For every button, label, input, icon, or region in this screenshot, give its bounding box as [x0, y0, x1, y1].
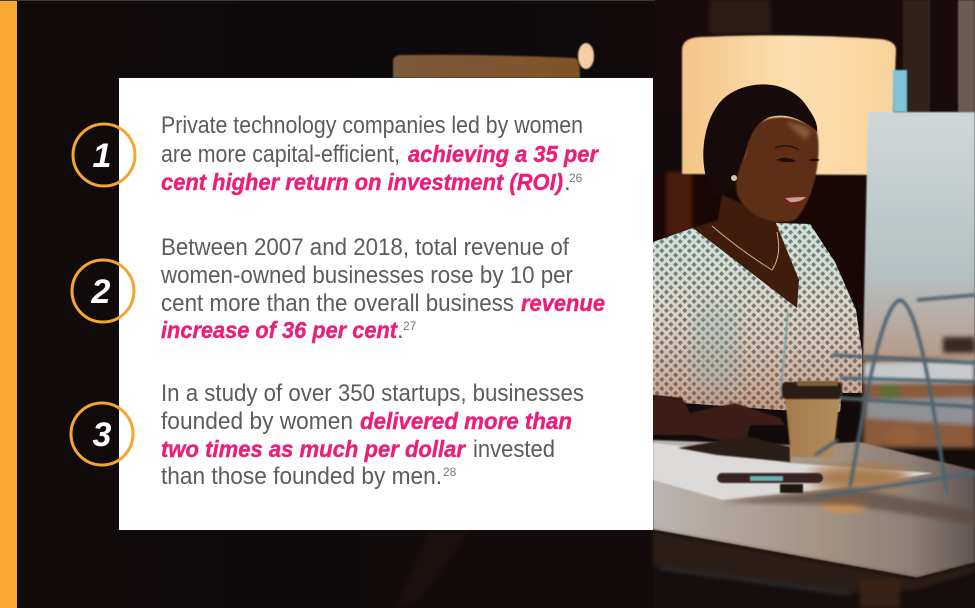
wire tray — [815, 295, 975, 497]
text block 3: than those founded by men. — [161, 463, 442, 490]
background lamp small — [393, 43, 594, 78]
desk — [653, 440, 975, 608]
text block 1: Private technology companies led by women — [161, 112, 583, 139]
computer monitor — [863, 112, 975, 360]
white text panel — [119, 78, 653, 530]
text block 1: achieving a 35 per — [408, 141, 600, 167]
woman's blouse — [653, 223, 862, 412]
necklace — [712, 226, 779, 270]
facial features — [731, 122, 820, 208]
text block 3: founded by women — [161, 408, 353, 435]
text block 2: women-owned businesses rose by 10 per — [160, 262, 573, 289]
orange side bar — [0, 1, 17, 608]
coffee cup — [782, 381, 842, 457]
paper on desk — [653, 443, 975, 525]
woman's neck and chest — [693, 195, 799, 308]
computer mouse and pad — [678, 436, 790, 462]
text block 3 — [161, 380, 584, 490]
text block 2: 27 — [403, 319, 417, 333]
woman's hand — [653, 395, 785, 445]
blue light — [893, 70, 907, 112]
number 2 badge: 2 — [91, 273, 111, 311]
text block 1: 26 — [569, 171, 583, 185]
lamp shade — [682, 35, 896, 175]
number 2 badge — [72, 260, 134, 322]
woman's face — [736, 117, 819, 222]
text block 3: invested — [473, 436, 555, 463]
text block 2: increase of 36 per cent — [161, 317, 398, 343]
text block 1: . — [564, 169, 571, 196]
text block 1: are more capital-efficient, — [161, 141, 400, 168]
text block 3: delivered more than — [360, 408, 572, 434]
number 1 badge — [73, 124, 135, 186]
number 3 badge — [71, 403, 133, 465]
text block 2 — [160, 234, 605, 344]
text block 2: . — [397, 317, 404, 344]
text block 3: two times as much per dollar — [161, 436, 467, 462]
text block 2: Between 2007 and 2018, total revenue of — [161, 234, 569, 261]
number 1 badge: 1 — [93, 137, 111, 175]
text block 1: cent higher return on investment (ROI) — [161, 169, 563, 195]
text block 2: cent more than the overall business — [161, 290, 514, 317]
phone — [717, 473, 823, 493]
desk clutter behind — [863, 337, 975, 448]
text block 1 — [161, 112, 600, 196]
woman's hair — [703, 84, 817, 197]
text block 2: revenue — [521, 290, 605, 316]
text block 3: In a study of over 350 startups, businesses — [161, 380, 584, 407]
number 3 badge: 3 — [93, 416, 112, 454]
text block 3: 28 — [443, 465, 457, 479]
